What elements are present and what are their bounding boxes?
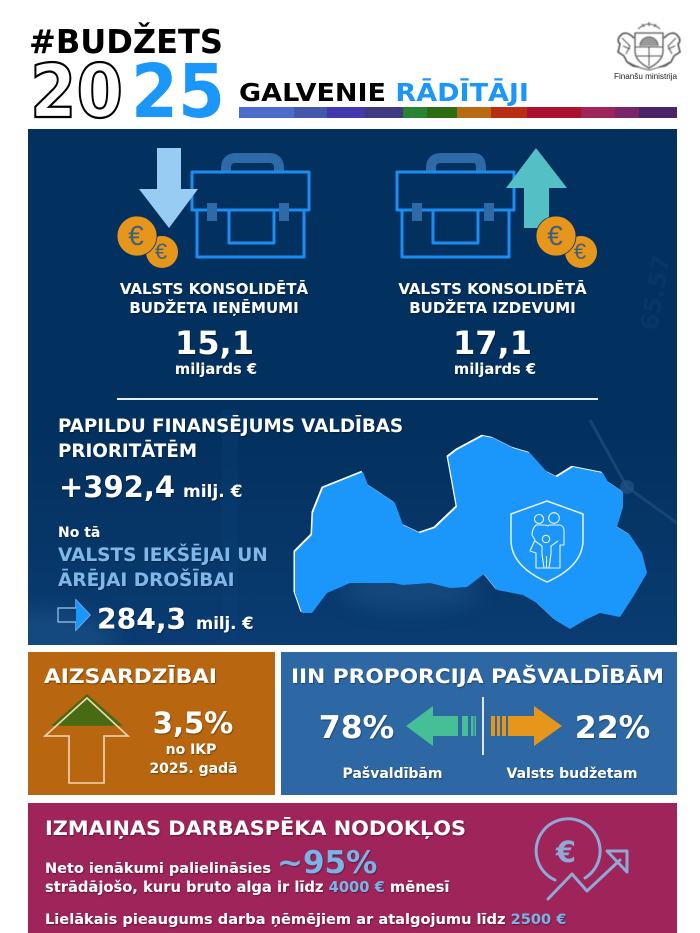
- logo: Finanšu ministrija coat of arms: [618, 22, 680, 70]
- map of Latvia: [294, 435, 647, 629]
- label: municipalities: Pašvaldībām: [343, 766, 442, 782]
- panel: labour tax: [28, 803, 677, 933]
- arrow up: [506, 148, 567, 228]
- heading: security: VALSTS IEKŠĒJAI UN: [58, 544, 268, 566]
- revenue label: BUDŽETA IEŅĒMUMI: [129, 297, 299, 317]
- expenditure label: BUDŽETA IZDEVUMI: [409, 298, 576, 317]
- header year: 2025: 20: [30, 49, 123, 135]
- value: 78%: 78%: [319, 710, 394, 746]
- text: no tā: No tā: [58, 525, 100, 541]
- briefcase outline: [192, 172, 309, 257]
- value: 22%: 22%: [575, 710, 650, 746]
- heading: security: ĀRĒJAI DROŠĪBAI: [58, 569, 235, 591]
- revenue value: 15,1: [175, 324, 254, 362]
- panel: IIN proportion: [281, 652, 677, 795]
- text: net income: ~95%: [277, 845, 377, 881]
- revenue unit: miljards €: [175, 361, 257, 378]
- euro coins: €: [547, 220, 563, 251]
- value: 3,5%: [153, 706, 233, 740]
- background financial chart pattern: [0, 253, 677, 670]
- header title: #BUDŽETS: #BUDŽETS: [29, 21, 223, 61]
- expenditure value: 17,1: [453, 324, 532, 362]
- group: revenue icon: [117, 148, 309, 268]
- heading: IZMAIŅAS DARBASPĒKA NODOKĻOS: [45, 817, 466, 840]
- text: net income: Neto ienākumi palielināsies: [45, 861, 271, 877]
- background financial chart pattern: 65.57: [635, 253, 676, 332]
- value: +392,4 milj. €: milj. €: [183, 482, 242, 502]
- euro coins: [117, 216, 178, 268]
- logo caption: Finanšu ministrija: [614, 72, 677, 81]
- heading: AIZSARDZĪBAI: [44, 665, 217, 688]
- arrow down: [139, 148, 198, 228]
- subtitle: galvenie rādītāji: GALVENIE RĀDĪTĀJI: [239, 78, 529, 107]
- panel: defence: [28, 652, 275, 795]
- heading: additional funding: PAPILDU FINANSĒJUMS VALDĪBAS: [58, 416, 403, 437]
- arrow left, green: [406, 706, 476, 746]
- header year: 2025: [30, 49, 225, 135]
- label: state budget: Valsts budžetam: [507, 766, 637, 782]
- colour strip: [239, 107, 677, 118]
- icon: euro growth: [536, 819, 627, 899]
- euro coins: €: [128, 220, 144, 251]
- arrow right, orange: [491, 706, 562, 746]
- panel: main budget: [0, 129, 677, 670]
- heading: IIN PROPORCIJA PAŠVALDĪBĀM: [291, 664, 664, 688]
- group: expenditure icon: [397, 148, 597, 268]
- heading: additional funding: PRIORITĀTĒM: [58, 441, 197, 462]
- revenue label: VALSTS KONSOLIDĒTĀ: [120, 278, 309, 298]
- icon: up arrow with green tip: [45, 695, 128, 783]
- euro coins: €: [155, 239, 167, 264]
- caption: no IKP: [166, 742, 216, 758]
- value: +392,4 milj. €: +392,4: [59, 470, 175, 504]
- icon: euro growth: €: [555, 835, 576, 869]
- icon: shield with family: [511, 501, 583, 582]
- euro coins: [536, 216, 597, 268]
- briefcase handle: [226, 158, 279, 172]
- value: 284,3 milj. €: milj. €: [196, 614, 254, 633]
- expenditure unit: miljards €: [454, 361, 536, 378]
- header year: 2025: 25: [131, 49, 225, 135]
- euro coins: €: [574, 239, 586, 264]
- caption: 2025. gadā: [149, 761, 238, 777]
- icon: small arrow: [58, 600, 90, 630]
- value: 284,3 milj. €: 284,3: [97, 603, 186, 636]
- text: net income: strādājošo, kuru bruto alga ir līdz 4000 € mēnesī: [45, 879, 449, 896]
- text: largest increase: Lielākais pieaugums darba ņēmējiem ar atalgojumu līdz 2500 €: [45, 911, 566, 928]
- expenditure label: VALSTS KONSOLIDĒTĀ: [398, 278, 587, 298]
